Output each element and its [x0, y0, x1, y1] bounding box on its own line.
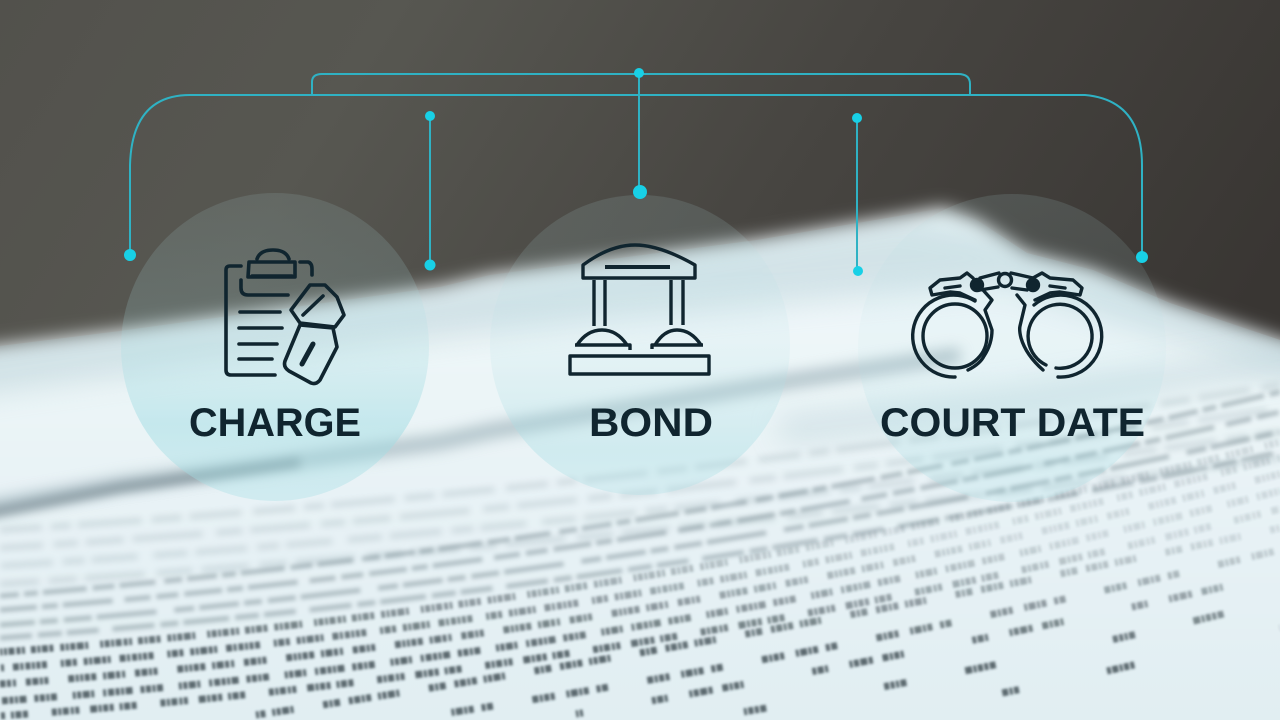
- blurred document text lines: [0, 385, 1280, 716]
- connector: main arch: [130, 95, 1142, 257]
- label: bond: BOND: [589, 401, 713, 445]
- label: court date: COURT DATE: [880, 401, 1145, 445]
- connector: left stem: [429, 116, 431, 265]
- icon: clipboard and tags: [226, 250, 344, 384]
- label: charge: CHARGE: [189, 401, 361, 445]
- blurred document page: [0, 208, 1280, 720]
- icon: handcuffs: [913, 273, 1102, 377]
- connector: right stem: [856, 118, 858, 271]
- panel: charge lens: [121, 193, 429, 501]
- connector dots: [124, 68, 1148, 276]
- icon: courthouse columns: [570, 245, 709, 374]
- panel: bond lens: [490, 195, 790, 495]
- panel: court date lens: [858, 194, 1166, 502]
- connector: centre stem: [638, 73, 640, 192]
- connector: upper bracket: [312, 74, 970, 95]
- connector network: [130, 73, 1142, 271]
